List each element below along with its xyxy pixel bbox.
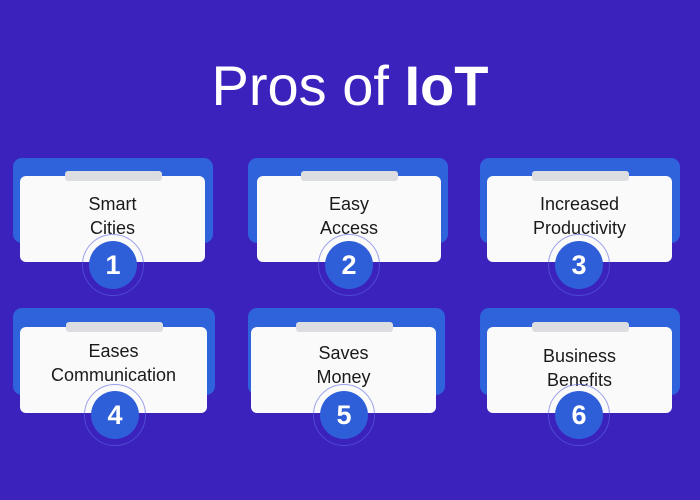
panel: Smart Cities: Cities — [90, 218, 135, 238]
number 6: 6 — [571, 400, 587, 430]
panel: Increased Productivity — [480, 158, 680, 296]
number 5: 5 — [336, 400, 352, 430]
number 6 — [555, 391, 603, 439]
number 2: 2 — [341, 250, 357, 280]
number 5 — [320, 391, 368, 439]
panel: Easy Access: Access — [320, 218, 378, 238]
number 4 — [91, 391, 139, 439]
panel: Easy Access: Easy — [329, 194, 369, 214]
number 3 — [555, 241, 603, 289]
panel: Business Benefits — [480, 308, 680, 446]
title: Pros of IoT — [212, 54, 488, 117]
panel: Business Benefits: Business — [543, 346, 616, 366]
panel: Smart Cities: Smart — [88, 194, 136, 214]
panel: Eases Communication — [13, 308, 215, 446]
panel: Business Benefits: Benefits — [547, 370, 612, 390]
number 1: 1 — [105, 250, 121, 280]
number 2 — [325, 241, 373, 289]
number 4: 4 — [107, 400, 123, 430]
panel: Eases Communication: Eases — [88, 341, 139, 361]
panel: Saves Money: Money — [316, 367, 371, 387]
panel: Saves Money — [248, 308, 445, 446]
panel: Eases Communication: Communication — [51, 365, 176, 385]
number 1 — [89, 241, 137, 289]
panel: Smart Cities — [13, 158, 213, 296]
panel: Increased Productivity: Productivity — [533, 218, 626, 238]
panel: Increased Productivity: Increased — [540, 194, 619, 214]
panel: Easy Access — [248, 158, 448, 296]
panel: Saves Money: Saves — [318, 343, 369, 363]
number 3: 3 — [571, 250, 587, 280]
